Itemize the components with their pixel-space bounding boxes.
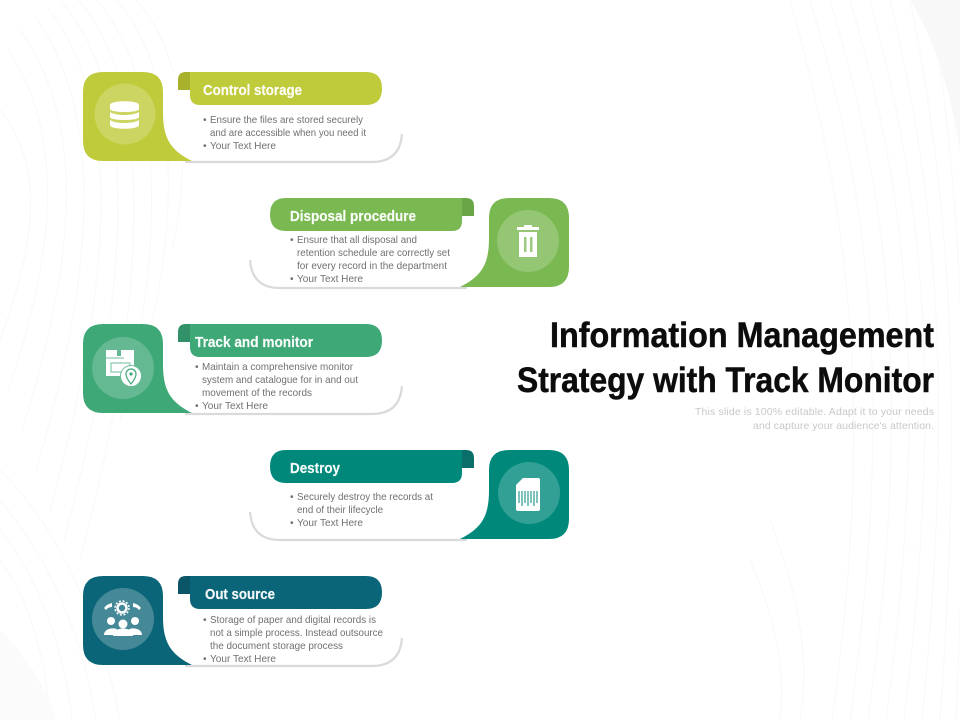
- bullet text: Your Text Here: [297, 274, 363, 285]
- bullet text: Maintain a comprehensive monitor: [202, 362, 354, 373]
- panel: disposal procedure: [250, 198, 569, 288]
- header fold: [178, 576, 194, 594]
- bullet text: •: [203, 115, 207, 126]
- bullet text: not a simple process. Instead outsource: [210, 628, 383, 639]
- subtitle: and capture your audience's attention.: [753, 420, 934, 432]
- bullet text: [203, 115, 366, 152]
- bullet text: [290, 235, 450, 285]
- header bar: [270, 450, 462, 483]
- icon: trash bin: [497, 210, 559, 272]
- header bar: [270, 198, 462, 231]
- bullet text: [195, 362, 358, 412]
- icon: box with location pin: [92, 337, 154, 399]
- bullet text: Storage of paper and digital records is: [210, 615, 376, 626]
- heading: Control storage: [203, 82, 302, 99]
- icon: team with gear: [92, 588, 154, 650]
- title: Information Management: [550, 316, 934, 355]
- bullet text: •: [203, 654, 207, 665]
- bullet text: for every record in the department: [297, 261, 447, 272]
- bullet text: •: [290, 492, 294, 503]
- panel: out source: [83, 576, 402, 666]
- header fold: [458, 450, 474, 468]
- bullet text: Your Text Here: [202, 401, 268, 412]
- header bar: [190, 324, 382, 357]
- header bar: [190, 576, 382, 609]
- bullet text: •: [203, 615, 207, 626]
- bullet text: Ensure that all disposal and: [297, 235, 417, 246]
- card background: [120, 72, 402, 162]
- bullet text: Your Text Here: [210, 654, 276, 665]
- header fold: [178, 72, 194, 90]
- title: [517, 316, 934, 400]
- bullet text: system and catalogue for in and out: [202, 375, 358, 386]
- bullet text: •: [195, 362, 199, 373]
- header fold: [458, 198, 474, 216]
- bullet text: Securely destroy the records at: [297, 492, 433, 503]
- subtitle: [695, 406, 934, 432]
- bullet text: Ensure the files are stored securely: [210, 115, 364, 126]
- colored side block: [460, 450, 569, 539]
- colored side block: [460, 198, 569, 287]
- colored side block: [83, 324, 192, 413]
- header bar: [190, 72, 382, 105]
- card background: [120, 576, 402, 666]
- bullet text: •: [290, 235, 294, 246]
- icon: memory card: [498, 462, 560, 524]
- panel: track and monitor: [83, 324, 402, 414]
- panel: destroy: [250, 450, 569, 540]
- colored side block: [83, 72, 192, 161]
- heading: Disposal procedure: [290, 208, 416, 225]
- panel: control storage: [83, 72, 402, 162]
- header fold: [178, 324, 194, 342]
- bullet text: [203, 615, 383, 665]
- heading: Track and monitor: [195, 334, 313, 351]
- bullet text: and are accessible when you need it: [210, 128, 366, 139]
- bullet text: •: [203, 141, 207, 152]
- bullet text: •: [290, 274, 294, 285]
- heading: Destroy: [290, 460, 341, 477]
- heading: Out source: [205, 586, 275, 603]
- bullet text: Your Text Here: [297, 518, 363, 529]
- bullet text: retention schedule are correctly set: [297, 248, 450, 259]
- icon: database: [94, 84, 156, 144]
- bullet text: movement of the records: [202, 388, 312, 399]
- bullet text: Your Text Here: [210, 141, 276, 152]
- bullet text: [290, 492, 433, 529]
- subtitle: This slide is 100% editable. Adapt it to your needs: [695, 406, 934, 418]
- card background: [250, 198, 532, 288]
- bullet text: the document storage process: [210, 641, 343, 652]
- bullet text: •: [290, 518, 294, 529]
- bullet text: •: [195, 401, 199, 412]
- card background: [250, 450, 532, 540]
- bullet text: end of their lifecycle: [297, 505, 383, 516]
- card background: [120, 324, 402, 414]
- colored side block: [83, 576, 192, 665]
